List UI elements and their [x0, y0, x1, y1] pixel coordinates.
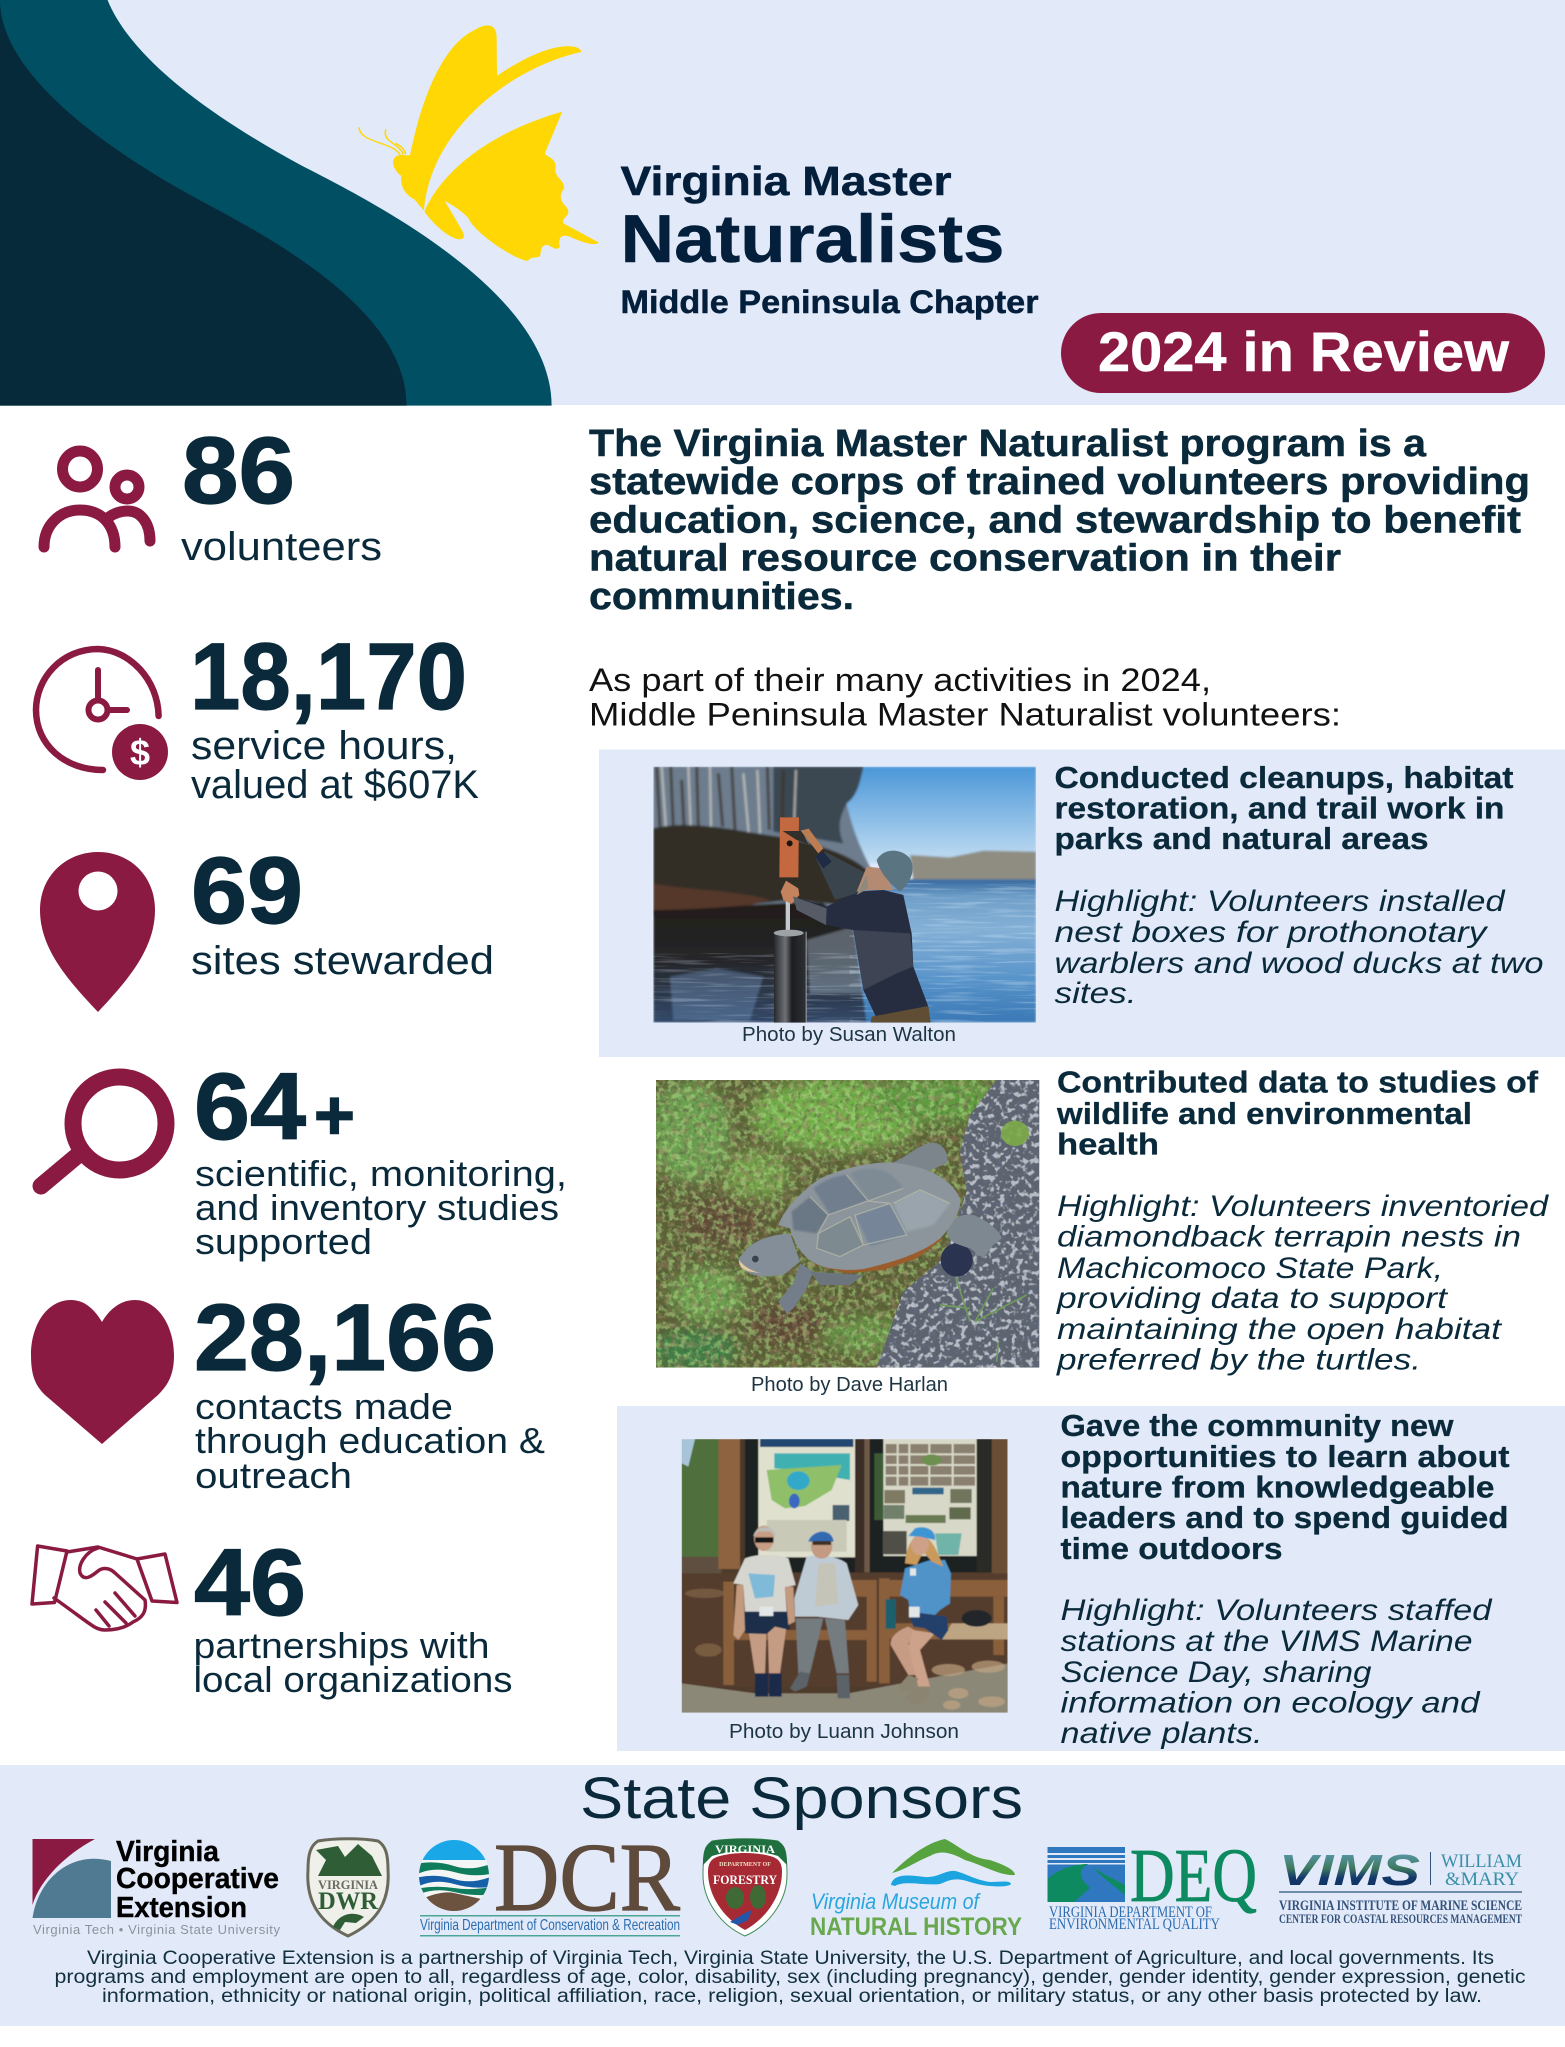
logo: Virginia DWR: VIRGINIA [318, 1877, 379, 1892]
stat: partnerships: partnerships with [194, 1625, 490, 1666]
logo: DEQ: DEQ [1130, 1834, 1257, 1918]
highlight text: Science Day, sharing [1060, 1656, 1372, 1689]
card heading: nature from knowledgeable [1060, 1470, 1494, 1504]
highlight text: providing data to support [1056, 1282, 1449, 1315]
intro paragraph: The Virginia Master Naturalist program is a [589, 423, 1427, 465]
highlight text: sites. [1054, 977, 1136, 1010]
logo: Virginia Museum of Natural History: Virginia Museum of [811, 1889, 982, 1914]
disclaimer text: programs and employment are open to all, regardless of age, color, disability, sex (including pregnancy), gender, gender identity, gender expression, genetic [54, 1967, 1526, 1988]
highlight text: Highlight: Volunteers staffed [1060, 1594, 1493, 1627]
stat: partnerships: 46 [194, 1530, 306, 1636]
logo: DEQ [1048, 1834, 1257, 1933]
stat: sites stewarded: sites stewarded [191, 939, 494, 983]
highlight text: stations at the VIMS Marine [1060, 1625, 1472, 1658]
title [620, 158, 1038, 320]
card heading [1054, 760, 1514, 856]
panel: community [617, 1406, 1565, 1751]
intro paragraph [589, 423, 1530, 618]
card heading: health [1057, 1126, 1159, 1162]
icon: people [44, 451, 150, 547]
logo: Virginia DWR [308, 1839, 388, 1936]
title: Virginia Master [620, 158, 952, 204]
highlight text [1060, 1594, 1493, 1750]
disclaimer text: information, ethnicity or national origin, political affiliation, race, religion, sexual orientation, or military status, or any other basis protected by law. [102, 1986, 1482, 2007]
stat: contacts [31, 1285, 545, 1496]
highlight text: preferred by the turtles. [1056, 1344, 1421, 1376]
stat: studies supported: + [314, 1076, 355, 1154]
stat: studies supported: 64 [194, 1054, 306, 1160]
footer panel [0, 1765, 1565, 2026]
stat: studies supported: and inventory studies [195, 1187, 559, 1228]
highlight text: Machicomoco State Park, [1057, 1252, 1443, 1285]
stat: partnerships [32, 1530, 512, 1700]
lead-in text: As part of their many activities in 2024, [589, 662, 1211, 698]
card heading: leaders and to spend guided [1060, 1500, 1508, 1535]
stat: contacts: 28,166 [194, 1285, 496, 1391]
stat: partnerships: local organizations [194, 1659, 512, 1700]
stat: contacts: contacts made [195, 1386, 453, 1427]
dark wave [0, 0, 406, 406]
card heading: Gave the community new [1060, 1408, 1454, 1443]
logo: Virginia Museum of Natural History [810, 1839, 1022, 1941]
badge: 2024 in Review [1061, 313, 1545, 393]
title: Middle Peninsula Chapter [620, 284, 1038, 320]
stat: service hours: valued at $607K [191, 763, 479, 807]
stat: sites stewarded [40, 838, 494, 1012]
butterfly lower wing [424, 112, 599, 261]
butterfly antennae [359, 127, 406, 155]
lead-in text: Middle Peninsula Master Naturalist volunteers: [589, 696, 1341, 732]
panel: cleanups [599, 750, 1565, 1057]
photo: volunteer installing nest box [653, 767, 1036, 1023]
highlight text: Highlight: Volunteers installed [1054, 885, 1506, 918]
logo: DCR [419, 1840, 680, 1936]
photo caption: Photo by Susan Walton [742, 1024, 956, 1046]
intro paragraph: communities. [589, 576, 854, 618]
stat: volunteers: 86 [182, 418, 295, 524]
highlight text: Highlight: Volunteers inventoried [1057, 1190, 1549, 1223]
panel: data [650, 1064, 1549, 1396]
logo: Virginia Forestry [703, 1839, 787, 1936]
highlight text: maintaining the open habitat [1057, 1313, 1503, 1346]
teal wave [0, 0, 552, 406]
intro paragraph: education, science, and stewardship to benefit [589, 500, 1521, 542]
logo: DCR: DCR [494, 1824, 681, 1932]
highlight text: native plants. [1060, 1717, 1262, 1750]
woman left [748, 1625, 787, 1673]
stat: service hours: 18,170 [190, 624, 467, 730]
logo: Virginia DWR: DWR [318, 1888, 379, 1915]
logo: Virginia Forestry: VIRGINIA [715, 1842, 775, 1856]
stat: contacts: outreach [195, 1455, 352, 1496]
stat: studies supported: supported [195, 1221, 372, 1262]
stat: service hours [36, 624, 479, 807]
intro paragraph: natural resource conservation in their [589, 538, 1341, 580]
icon: yellow butterfly [359, 25, 599, 261]
title: Naturalists [620, 201, 1004, 277]
logo: VIMS William and Mary: WILLIAM [1441, 1851, 1522, 1872]
highlight text: information on ecology and [1060, 1686, 1481, 1720]
intro paragraph: statewide corps of trained volunteers providing [589, 461, 1530, 503]
stat: sites stewarded: 69 [191, 838, 303, 944]
logo: Virginia Museum of Natural History: NATURAL HISTORY [810, 1913, 1022, 1941]
icon: clock with dollar [36, 649, 168, 780]
logo: Virginia Forestry: FORESTRY [713, 1872, 778, 1887]
card heading: Conducted cleanups, habitat [1054, 760, 1514, 795]
photo caption: Photo by Luann Johnson [729, 1721, 959, 1743]
photo: diamondback terrapin [650, 1077, 1039, 1370]
butterfly upper wing and body [393, 25, 581, 211]
icon: heart [31, 1300, 174, 1444]
logo: VIMS William and Mary: VIMS [1279, 1846, 1420, 1895]
logo: Virginia Cooperative Extension: Virginia Tech • Virginia State University [33, 1922, 280, 1937]
logo: Virginia Cooperative Extension: Virginia [116, 1836, 220, 1868]
badge: 2024 in Review: 2024 in Review [1098, 320, 1509, 383]
logo: Virginia Forestry: DEPARTMENT OF [719, 1862, 771, 1868]
stat: contacts: through education & [195, 1420, 545, 1461]
card heading: Contributed data to studies of [1057, 1064, 1539, 1100]
highlight text [1054, 885, 1544, 1010]
logo: DCR: Virginia Department of Conservation & Recreation [420, 1917, 680, 1934]
logo: Virginia Cooperative Extension: Cooperative [116, 1863, 279, 1895]
man center [796, 1618, 849, 1673]
card heading: opportunities to learn about [1060, 1439, 1510, 1474]
card heading [1060, 1408, 1510, 1566]
disclaimer text: Virginia Cooperative Extension is a partnership of Virginia Tech, Virginia State University, the U.S. Department of Agriculture, and local governments. Its [87, 1948, 1494, 1969]
icon: magnifying glass [41, 1077, 166, 1186]
heading: State Sponsors: State Sponsors [580, 1766, 1023, 1831]
photo caption: Photo by Dave Harlan [751, 1374, 948, 1396]
highlight text: nest boxes for prothonotary [1054, 916, 1489, 949]
highlight text: diamondback terrapin nests in [1057, 1220, 1521, 1254]
header band [0, 0, 1565, 406]
stat: volunteers [44, 418, 382, 569]
card heading [1056, 1064, 1539, 1162]
stat: service hours: service hours, [191, 724, 457, 768]
disclaimer text [54, 1948, 1526, 2007]
highlight text: warblers and wood ducks at two [1054, 947, 1544, 980]
card heading: restoration, and trail work in [1054, 790, 1504, 826]
icon: handshake [32, 1546, 177, 1630]
lead-in text [589, 662, 1341, 732]
card heading: parks and natural areas [1054, 821, 1428, 856]
logo: DEQ: ENVIRONMENTAL QUALITY [1049, 1916, 1220, 1933]
logo: Virginia Cooperative Extension: Extension [116, 1892, 247, 1924]
card heading: wildlife and environmental [1056, 1096, 1472, 1131]
logo: DEQ: VIRGINIA DEPARTMENT OF [1049, 1904, 1212, 1921]
card heading: time outdoors [1060, 1531, 1282, 1566]
logo: Virginia Cooperative Extension [32, 1836, 280, 1937]
icon: map pin [40, 852, 155, 1012]
icon: clock with dollar: $ [130, 732, 150, 773]
stat: studies supported: scientific, monitoring, [195, 1153, 567, 1194]
stat: studies supported [41, 1054, 567, 1262]
logo: VIMS William and Mary [1279, 1846, 1522, 1926]
logo: VIMS William and Mary: &MARY [1445, 1869, 1519, 1890]
highlight text [1056, 1190, 1549, 1376]
stat: volunteers: volunteers [181, 525, 382, 569]
photo: volunteers on bench [682, 1439, 1008, 1713]
woman right [891, 1627, 920, 1675]
